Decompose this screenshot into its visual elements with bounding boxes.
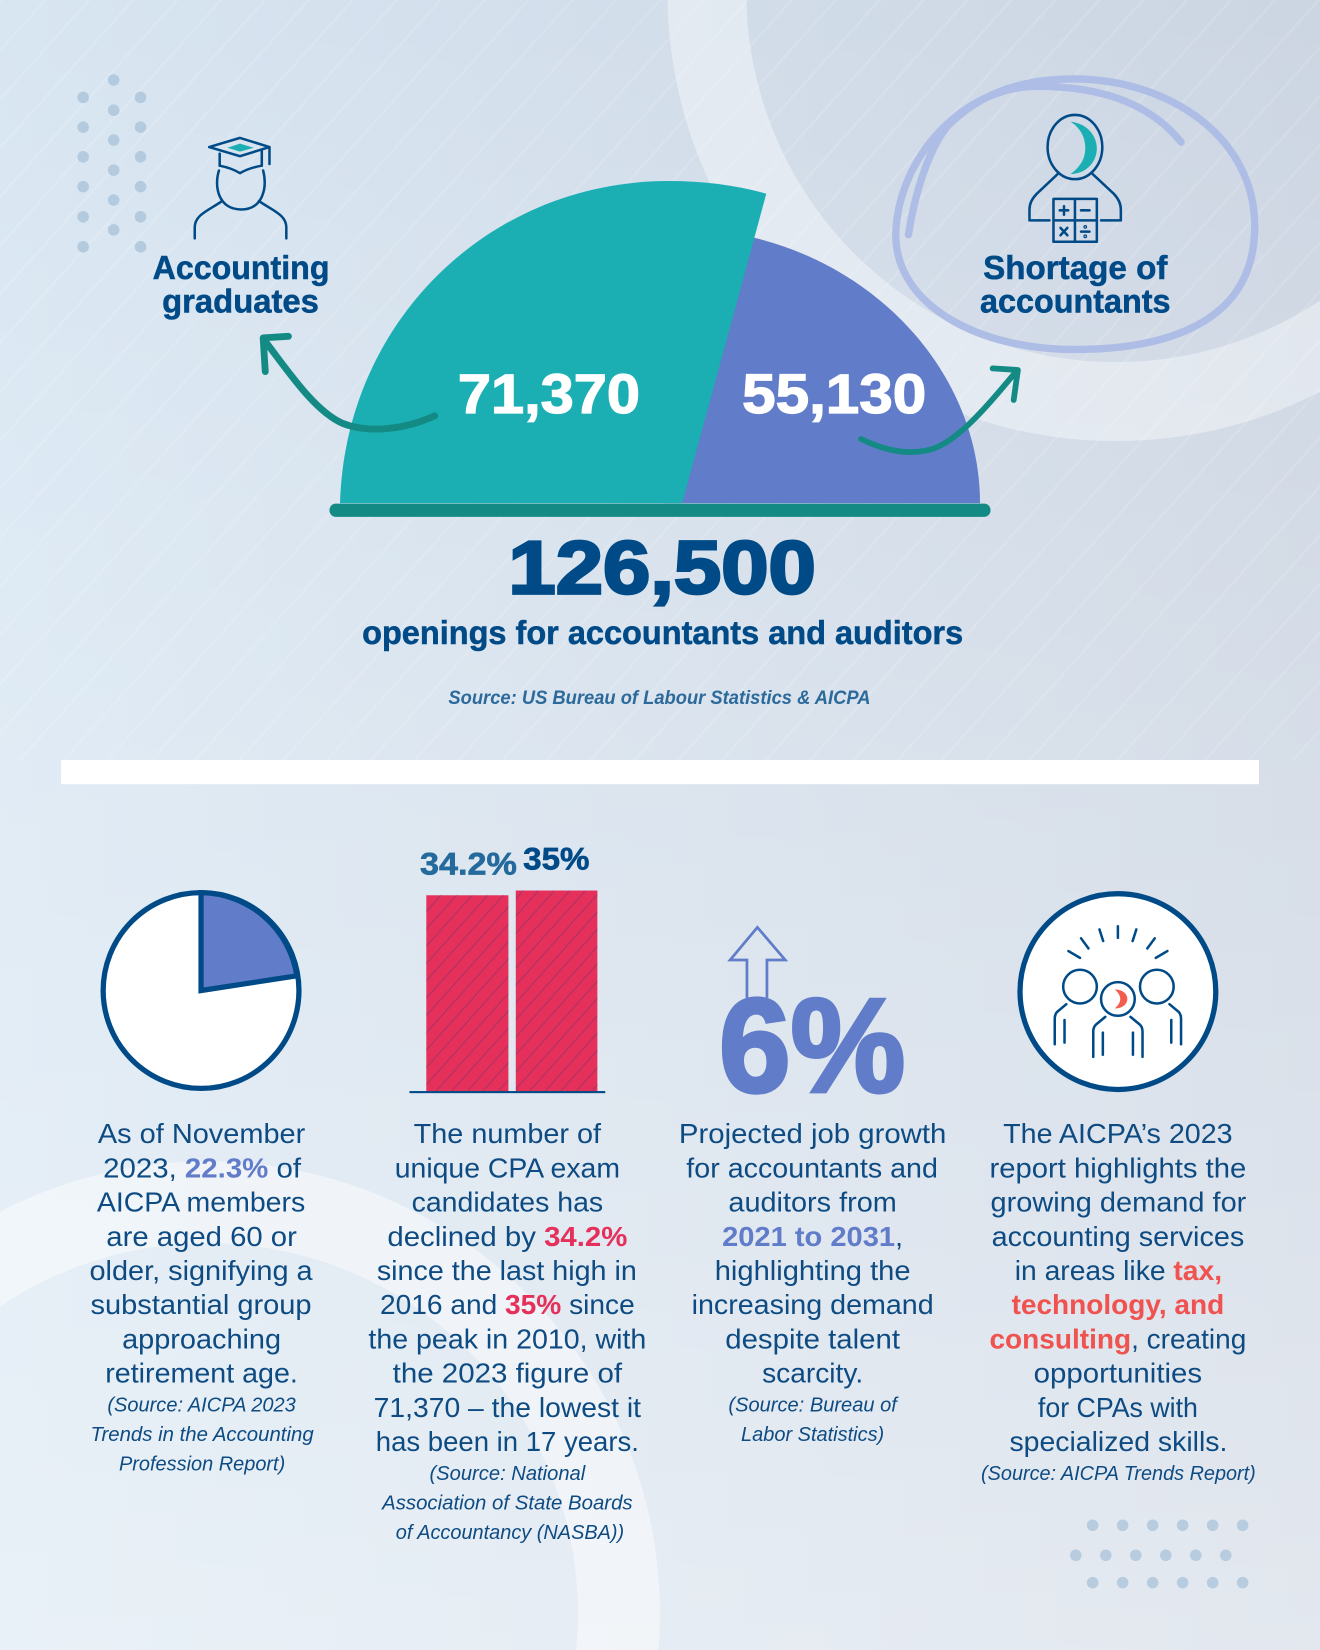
source: NASBA: (Source: National: [429, 1462, 587, 1485]
segment: accounting graduates: [340, 181, 766, 503]
chart base: [329, 504, 991, 517]
white divider bar: [61, 760, 1259, 784]
text block: demand for services: opportunities: [1034, 1358, 1202, 1389]
axis: [409, 1091, 605, 1093]
text block: AICPA members: retirement age.: [105, 1358, 298, 1389]
icon: graduate: [195, 138, 286, 238]
heading: accounting graduates: [153, 250, 329, 321]
text block: job growth: despite talent: [725, 1323, 900, 1354]
text block: CPA exam candidates: 71,370 – the lowest it: [374, 1392, 641, 1423]
text block: CPA exam candidates: 2016 and 35% since: [380, 1289, 635, 1320]
source: Bureau of Labor Statistics: [728, 1394, 899, 1446]
heading: shortage of accountants: [980, 250, 1171, 321]
text block: AICPA members: approaching: [122, 1323, 281, 1354]
icon: up arrow: [730, 927, 785, 998]
text block: CPA exam candidates: The number of: [414, 1118, 601, 1149]
segment: shortage of accountants: [663, 234, 980, 503]
source: AICPA Trends Report: (Source: AICPA Trends Report): [981, 1462, 1256, 1485]
text block: job growth: 2021 to 2031 ,: [722, 1221, 903, 1252]
source: AICPA 2023 report: [91, 1394, 314, 1476]
value: 71,370: 71,370: [458, 363, 640, 425]
icon: people in circle: [1020, 894, 1216, 1089]
text block: demand for services: The AICPA’s 2023: [1003, 1118, 1233, 1149]
arrow: to graduates: [263, 336, 435, 429]
text block: CPA exam candidates: has been in 17 years.: [376, 1426, 639, 1457]
source: AICPA 2023 report: (Source: AICPA 2023: [107, 1394, 296, 1417]
figure: 6%: 6%: [719, 972, 905, 1121]
subtitle: openings for accountants and auditors: [362, 615, 963, 652]
text block: demand for services: technology, and: [1012, 1289, 1224, 1320]
semicircle chart: [329, 181, 991, 517]
icon: accountant with calculator: [1029, 115, 1121, 242]
text block: job growth: for accountants and: [686, 1152, 938, 1183]
text block: demand for services: for CPAs with: [1038, 1392, 1198, 1423]
bar: 35%: [516, 891, 597, 1092]
text block: job growth: Projected job growth: [679, 1118, 946, 1149]
pie chart: [103, 893, 299, 1088]
text block: job growth: increasing demand: [692, 1289, 934, 1320]
value: 55,130: 55,130: [742, 363, 926, 425]
scribble circle: [896, 79, 1255, 349]
heading: shortage of accountants: Shortage of: [983, 250, 1168, 287]
text block: job growth: auditors from: [728, 1187, 897, 1218]
text block: demand for services: consulting, creating: [989, 1323, 1246, 1354]
text block: AICPA members: 2023, 22.3% of: [103, 1152, 301, 1183]
label: 35%: 35%: [523, 840, 589, 876]
text block: AICPA members: are aged 60 or: [106, 1221, 297, 1252]
heading: accounting graduates: Accounting: [153, 250, 329, 287]
text block: job growth: scarcity.: [762, 1358, 863, 1389]
dot pattern: bottom right: [1070, 1519, 1248, 1588]
text block: AICPA members: AICPA members: [97, 1187, 305, 1218]
source line: Source: US Bureau of Labour Statistics & AICPA: [448, 688, 871, 709]
bar: 34.2%: [426, 895, 508, 1092]
heading: shortage of accountants: accountants: [980, 284, 1171, 321]
source: Bureau of Labor Statistics: Labor Statistics): [741, 1423, 884, 1446]
text block: CPA exam candidates: declined by 34.2%: [387, 1221, 628, 1252]
source: Bureau of Labor Statistics: (Source: Bureau of: [728, 1394, 899, 1417]
text block: job growth: highlighting the: [715, 1255, 911, 1286]
text block: demand for services: report highlights the: [989, 1152, 1246, 1183]
label: 34.2%: 34.2%: [420, 846, 517, 882]
source: AICPA 2023 report: Trends in the Accounting: [91, 1423, 314, 1446]
source: NASBA: [380, 1462, 633, 1544]
text block: CPA exam candidates: the peak in 2010, with: [368, 1323, 646, 1354]
dot pattern: top left: [77, 74, 146, 253]
text block: demand for services: [989, 1118, 1246, 1457]
text block: CPA exam candidates: unique CPA exam: [395, 1152, 620, 1183]
text block: demand for services: accounting services: [992, 1221, 1244, 1252]
text block: demand for services: in areas like tax,: [1015, 1255, 1222, 1286]
text block: CPA exam candidates: the 2023 figure of: [393, 1358, 622, 1389]
bar chart: [409, 840, 605, 1093]
source: AICPA 2023 report: Profession Report): [119, 1453, 285, 1476]
text block: CPA exam candidates: [368, 1118, 646, 1457]
text block: CPA exam candidates: candidates has: [412, 1187, 603, 1218]
heading: accounting graduates: graduates: [162, 284, 319, 321]
arrow: to shortage: [861, 368, 1018, 452]
total: 126,500: 126,500: [508, 526, 816, 610]
text block: AICPA members: older, signifying a: [89, 1255, 313, 1286]
text block: demand for services: specialized skills.: [1009, 1426, 1227, 1457]
text block: AICPA members: As of November: [98, 1118, 305, 1149]
text block: CPA exam candidates: since the last high in: [377, 1255, 637, 1286]
source: NASBA: Association of State Boards: [380, 1491, 633, 1514]
text block: AICPA members: substantial group: [91, 1289, 312, 1320]
source: NASBA: of Accountancy (NASBA)): [396, 1521, 624, 1544]
text block: AICPA members: [89, 1118, 313, 1389]
text block: demand for services: growing demand for: [991, 1187, 1246, 1218]
text block: job growth: [679, 1118, 946, 1389]
